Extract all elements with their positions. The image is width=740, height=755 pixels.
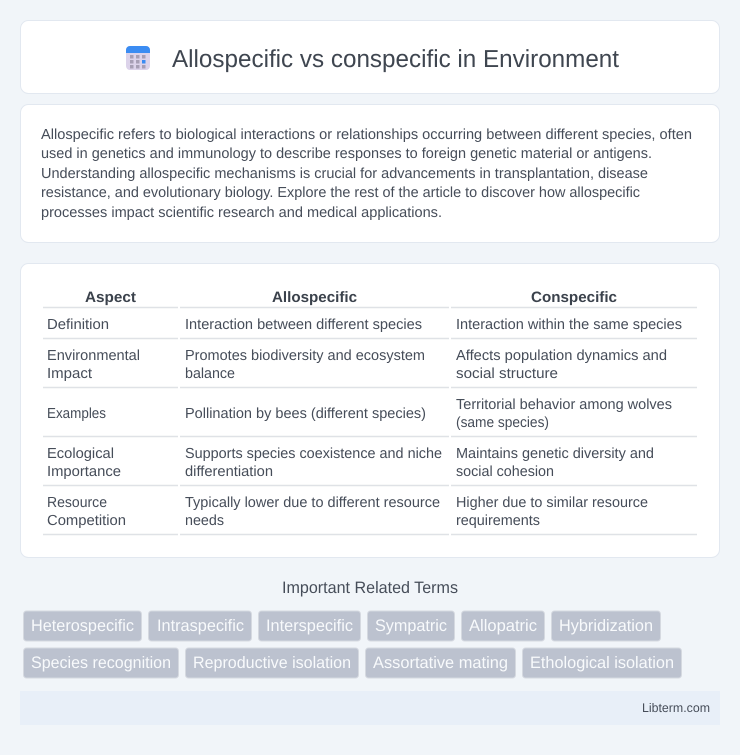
table row: ecological importance: Importance (47, 464, 121, 480)
table row: resource competition: Competition (47, 513, 126, 529)
table row: resource competition: Typically lower due to different resource (185, 495, 440, 511)
table row: definition: Interaction within the same species (456, 317, 682, 333)
table row: examples: (same species) (456, 415, 549, 431)
tag: Assortative mating: Assortative mating (373, 653, 508, 672)
table header row: Aspect (85, 289, 136, 306)
table row: environmental impact: Affects population dynamics and (456, 348, 667, 364)
table row: definition: Definition (47, 317, 109, 333)
table row: ecological importance: differentiation (185, 464, 273, 480)
table row: examples (47, 397, 672, 431)
table row: environmental impact (47, 348, 667, 382)
text block: introduction paragraph: Understanding allospecific mechanisms is crucial for advancements in transplantation, disease (41, 166, 648, 182)
table row: examples: Examples (47, 406, 106, 422)
table row: environmental impact: Impact (47, 366, 92, 382)
tag: Sympatric: Sympatric (375, 616, 447, 635)
table row: ecological importance: social cohesion (456, 464, 554, 480)
tag: Interspecific: Interspecific (266, 616, 353, 635)
table row: examples: Pollination by bees (different species) (185, 406, 426, 422)
text block: introduction paragraph: resistance, and evolutionary biology. Explore the rest of the article to discover how allospecific (41, 185, 640, 201)
tag: Intraspecific: Intraspecific (157, 616, 244, 635)
panel: header (20, 20, 720, 94)
tag: Species recognition (24, 648, 178, 678)
table row: ecological importance: Supports species coexistence and niche (185, 446, 442, 462)
panel: footer (20, 691, 720, 725)
panel: related term tags (24, 611, 682, 678)
tag: Intraspecific (148, 611, 252, 641)
tag: Species recognition: Species recognition (31, 653, 171, 672)
table row: definition: Interaction between different species (185, 317, 422, 333)
tag: Allopatric: Allopatric (469, 616, 537, 635)
tag: Reproductive isolation (186, 648, 358, 678)
text block: introduction paragraph: used in genetics and immunology to describe responses to foreign genetic material or antigens. (41, 146, 652, 162)
tag: Heterospecific (24, 611, 142, 641)
tag: Hybridization: Hybridization (559, 616, 653, 635)
text block: introduction paragraph: processes impact scientific research and medical applications. (41, 205, 442, 221)
table row: ecological importance (47, 446, 654, 480)
panel: introduction (20, 104, 720, 242)
table row: environmental impact: Environmental (47, 348, 140, 364)
table row: ecological importance: Maintains genetic diversity and (456, 446, 654, 462)
table header row (85, 289, 617, 306)
tag: Interspecific (258, 611, 360, 641)
panel: comparison table (20, 264, 720, 558)
tag: Ethological isolation: Ethological isolation (530, 653, 674, 672)
table row: environmental impact: balance (185, 366, 235, 382)
table row: resource competition: Higher due to similar resource (456, 495, 648, 511)
footer text: source: Libterm.com (642, 701, 710, 715)
table header row: Conspecific (531, 289, 617, 306)
table row: resource competition: requirements (456, 513, 540, 529)
icon: calendar grid (126, 46, 150, 70)
table row: environmental impact: social structure (456, 366, 558, 382)
table row: resource competition (47, 495, 648, 529)
heading: important related terms: Important Related Terms (282, 578, 458, 597)
tag: Heterospecific: Heterospecific (31, 616, 134, 635)
table row: ecological importance: Ecological (47, 446, 114, 462)
title: Allospecific vs conspecific in Environment (172, 46, 619, 73)
table row: resource competition: Resource (47, 495, 107, 511)
tag: Ethological isolation (522, 648, 682, 678)
table row: definition (47, 317, 682, 333)
table row: environmental impact: Promotes biodiversity and ecosystem (185, 348, 425, 364)
text block: introduction paragraph (41, 127, 692, 221)
text block: introduction paragraph: Allospecific refers to biological interactions or relationships occurring between different species, often (41, 127, 692, 143)
tag: Allopatric (462, 611, 544, 641)
tag: Assortative mating (366, 648, 516, 678)
table row: resource competition: needs (185, 513, 224, 529)
table header row: Allospecific (272, 289, 357, 306)
tag: Hybridization (552, 611, 660, 641)
tag: Reproductive isolation: Reproductive isolation (193, 653, 351, 672)
tag: Sympatric (368, 611, 454, 641)
table row: examples: Territorial behavior among wolves (456, 397, 672, 413)
